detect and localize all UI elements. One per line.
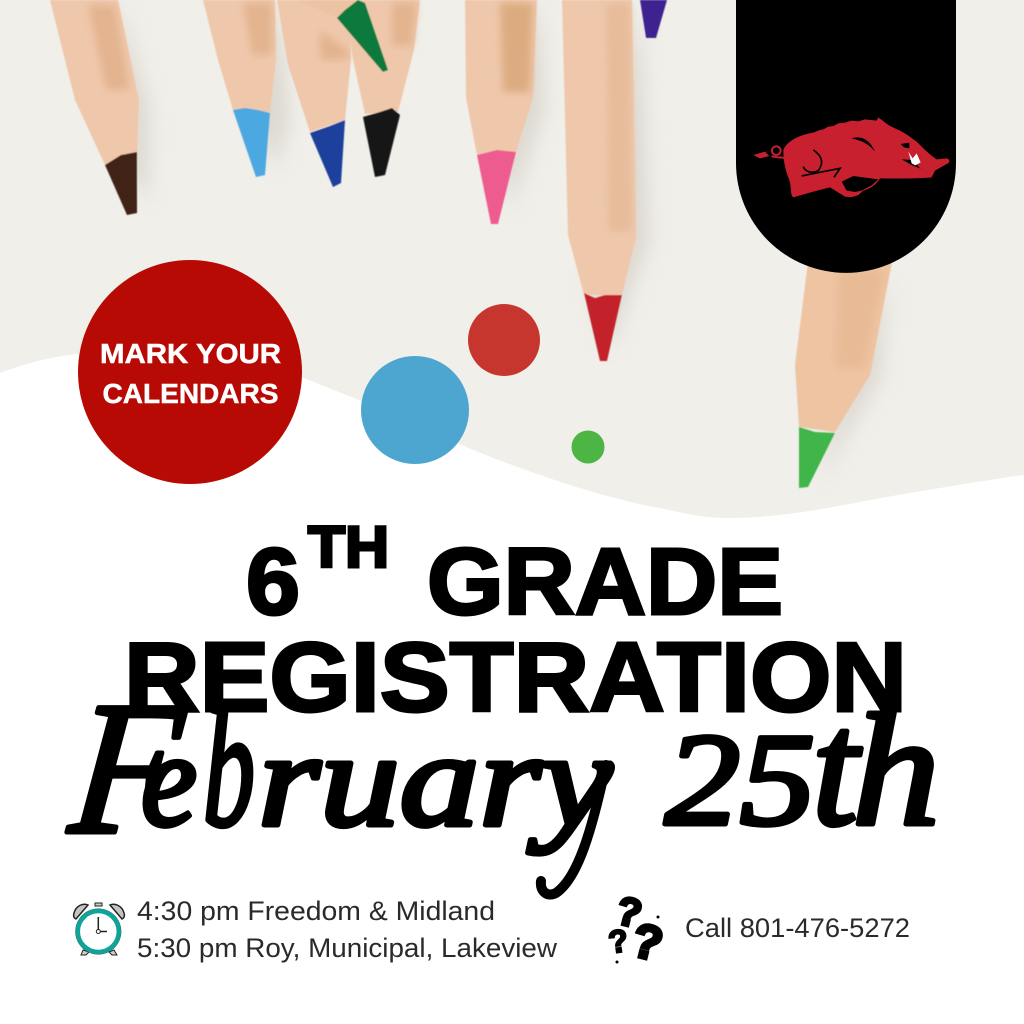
pencil: red tip	[562, 0, 636, 361]
text: phone: Call 801-476-5272	[685, 913, 910, 943]
text: times and schools	[137, 896, 558, 963]
pencil shadows	[120, 0, 890, 480]
pencil: dark blue tip	[277, 0, 351, 187]
pencil: bright green tip	[795, 262, 892, 488]
script date: February 25th: b	[203, 674, 255, 862]
script date: February 25th: t	[812, 677, 862, 860]
badge: black tab with hog logo	[736, 0, 956, 273]
decorative dot: red	[468, 304, 540, 376]
title: 6th grade registration: 6	[246, 529, 300, 635]
script date: February 25th: F	[61, 663, 192, 874]
wave: white lower area	[0, 350, 1024, 1024]
icon: question marks: ?	[606, 922, 630, 960]
text: times and schools: 4:30 pm Freedom & Midland	[137, 896, 495, 926]
decorative dot: blue	[361, 356, 469, 464]
pencil: brown tip	[50, 0, 139, 215]
pencil: black tip	[345, 0, 420, 177]
icon: question marks	[606, 888, 668, 972]
pencil: light blue tip	[203, 0, 276, 177]
callout circle: mark your calendars: CALENDARS	[102, 378, 278, 409]
script date: February 25th	[61, 663, 940, 895]
pencil: purple tip	[640, 0, 667, 38]
text: times and schools: 5:30 pm Roy, Municipal, Lakeview	[137, 933, 558, 963]
pencil: green tip	[297, 0, 388, 72]
pencil: pink tip	[465, 0, 537, 224]
photo background	[0, 0, 1024, 530]
script date: February 25th: e	[141, 706, 197, 855]
script date: February 25th: 25	[665, 706, 815, 853]
title: 6th grade registration: TH	[308, 515, 389, 580]
title: 6th grade registration: GRADE	[427, 529, 783, 635]
callout circle: mark your calendars: MARK YOUR	[100, 338, 281, 369]
flourish: y descender swash	[541, 765, 606, 895]
decorative dot: green	[572, 430, 604, 464]
icon: alarm clock	[74, 903, 124, 955]
callout circle: mark your calendars	[78, 260, 302, 484]
pencils photo	[50, 0, 892, 488]
icon: razorback hog	[753, 117, 949, 197]
icon: question marks: ?	[612, 888, 646, 937]
title: 6th grade registration	[124, 515, 907, 732]
title: 6th grade registration: REGISTRATION	[124, 622, 907, 732]
icon: question marks: ?	[627, 914, 668, 972]
script date: February 25th: h	[852, 681, 940, 859]
script date: February 25th: ruary	[258, 706, 612, 855]
